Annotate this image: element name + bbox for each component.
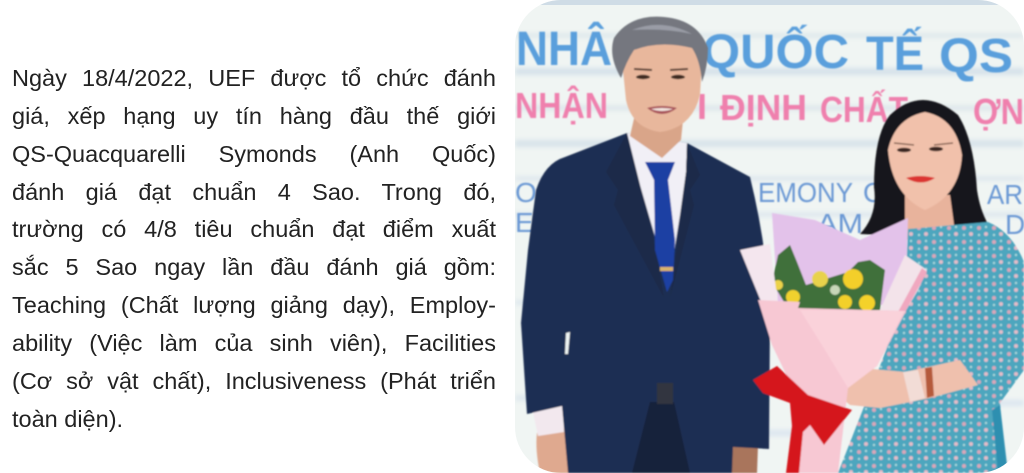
banner heading: pink [515,84,1024,132]
banner subtitle: English: O [515,177,537,208]
lapels [608,134,662,292]
face [888,112,962,210]
belt [657,383,673,404]
text block: paragraph about QS rating: trường có 4/8 tiêu chuẩn đạt điểm xuất [12,216,496,242]
trousers [632,402,690,473]
banner subtitle: English [516,182,1024,235]
banner heading: pink: ĐỊNH [720,87,807,128]
forearm and hand [830,360,978,408]
banner heading: pink: CHẤT [820,89,908,130]
red ribbon [753,366,852,473]
pink wrapper [758,300,906,473]
text block: paragraph about QS rating: đánh giá đạt chuẩn 4 Sao. Trong đó, [12,179,496,205]
banner heading: blue: QUỐC [702,24,849,79]
banner subtitle: English: EMONY [758,177,853,208]
text block: paragraph about QS rating: toàn diện). [12,406,123,432]
woman [830,100,1024,473]
hands and cuff [536,428,570,473]
hair [860,100,988,238]
text block: paragraph about QS rating [12,65,496,432]
banner heading: pink: I [697,86,707,127]
banner heading: pink: NHẬN [515,84,608,126]
text block: paragraph about QS rating: Teaching (Chất lượng giảng dạy), Employ- [12,292,496,318]
banner heading: blue: NHÂ [516,21,612,76]
flowers and leaves [772,245,885,312]
suit jacket [521,133,770,473]
bouquet [740,213,927,473]
banner heading: blue: QS [939,30,1013,83]
man [521,17,770,473]
photo: two people with bouquet at the QS ceremony [515,0,1024,473]
text block: paragraph about QS rating: QS-Quacquarelli Symonds (Anh Quốc) [12,141,496,167]
banner heading: blue: TẾ [866,27,924,81]
white paper rolls [740,244,778,304]
text block: paragraph about QS rating: Ngày 18/4/2022, UEF được tổ chức đánh [12,65,496,91]
text block: paragraph about QS rating: (Cơ sở vật chất), Inclusiveness (Phát triển [12,368,496,394]
neck [630,118,684,158]
banner subtitle: English: O [863,177,885,208]
teal floral dress [838,222,1024,473]
text block: paragraph about QS rating: sắc 5 Sao ngay lần đầu đánh giá gồm: [12,254,496,280]
banner subtitle: English: E [515,207,534,238]
text block: paragraph about QS rating: giá, xếp hạng uy tín hàng đầu thế giới [12,103,496,129]
lilac back wrap [772,213,908,305]
necktie [645,162,675,292]
banner subtitle: English: AM [817,208,863,239]
shirt [626,132,688,250]
text block: paragraph about QS rating: ability (Việc làm của sinh viên), Facilities [12,330,496,356]
face [622,40,702,132]
stage backdrop [515,0,1024,473]
neck [905,195,955,240]
hair [612,17,708,82]
banner heading: blue [516,21,1013,83]
